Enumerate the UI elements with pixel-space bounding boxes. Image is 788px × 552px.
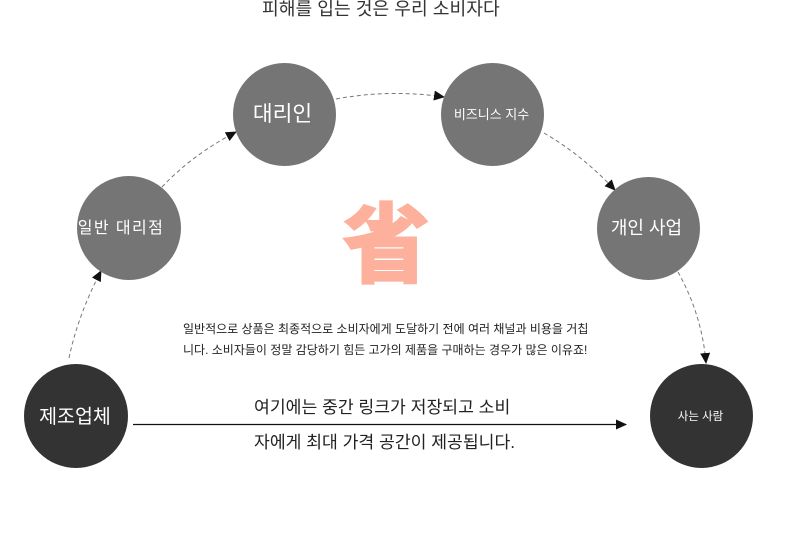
description text: 일반적으로 상품은 최종적으로 소비자에게 도달하기 전에 여러 채널과 비용을 거칩 bbox=[183, 322, 588, 336]
node: 비즈니스 지수: 비즈니스 지수 bbox=[454, 107, 529, 122]
node: 개인 사업 bbox=[597, 177, 700, 280]
node: 사는 사람: 사는 사람 bbox=[678, 411, 723, 423]
direct link caption: 여기에는 중간 링크가 저장되고 소비 bbox=[254, 397, 510, 417]
direct link caption bbox=[254, 397, 515, 452]
direct link caption: 자에게 최대 가격 공간이 제공됩니다. bbox=[254, 432, 515, 452]
description text: 니다. 소비자들이 정말 감당하기 힘든 고가의 제품을 구매하는 경우가 많은 이유죠! bbox=[183, 343, 587, 357]
node: 비즈니스 지수 bbox=[441, 63, 544, 166]
node: 제조업체: 제조업체 bbox=[39, 406, 111, 428]
node: 일반 대리점: 일반 대리점 bbox=[78, 220, 164, 237]
node: 대리인: 대리인 bbox=[253, 102, 312, 126]
node: 사는 사람 bbox=[650, 364, 753, 468]
node: 대리인 bbox=[233, 63, 336, 166]
node: 개인 사업: 개인 사업 bbox=[611, 218, 682, 238]
node: 일반 대리점 bbox=[77, 176, 181, 280]
description text bbox=[183, 322, 588, 357]
node: 제조업체 bbox=[24, 364, 128, 468]
center character: 省 bbox=[343, 175, 429, 300]
